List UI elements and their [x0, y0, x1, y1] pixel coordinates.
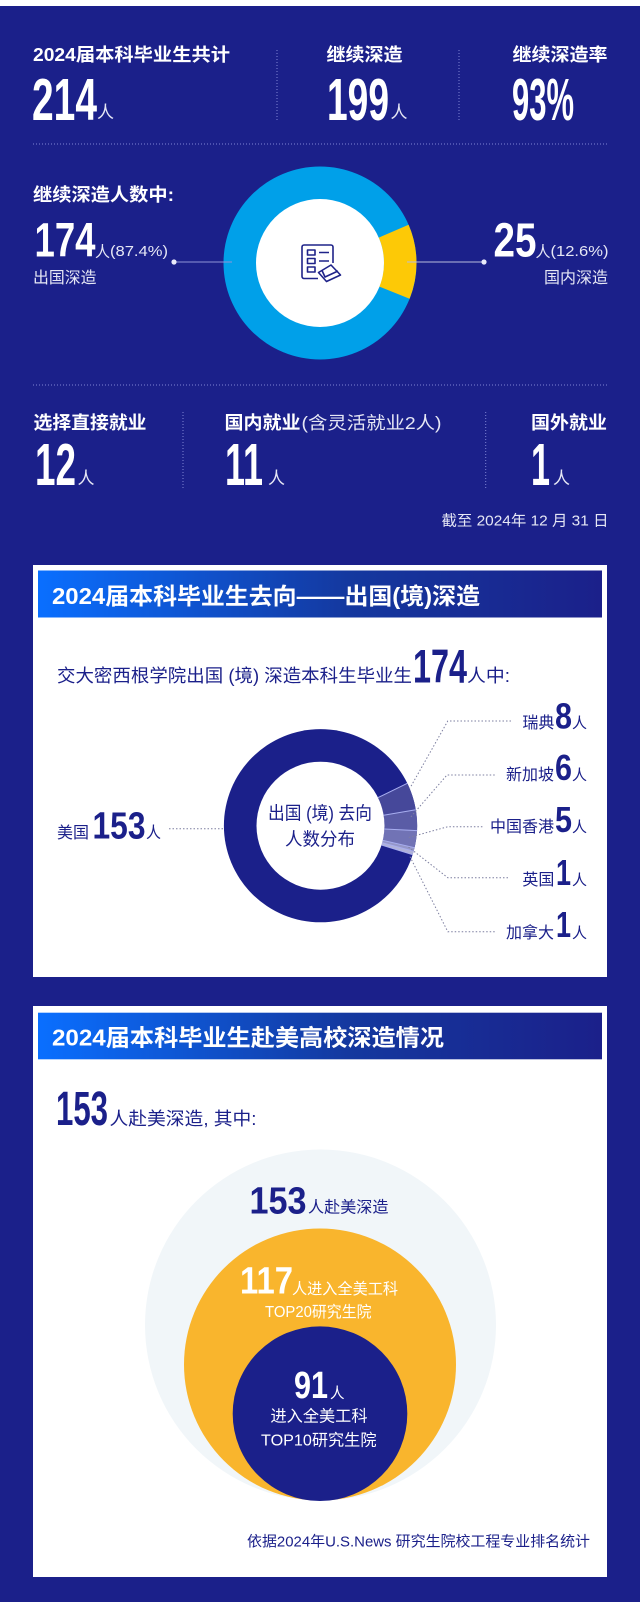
circle: 153 to US [145, 1150, 496, 1500]
callout: domestic [407, 214, 608, 287]
panel: overseas destinations [33, 565, 607, 977]
source note: 依据2024年U.S.News 研究生院校工程专业排名统计 [247, 1534, 590, 1550]
card background [33, 1006, 607, 1577]
stat: domestic employment [224, 413, 442, 498]
stat: overseas employment: 国外就业 [531, 413, 607, 433]
label: Hong Kong: 5 [555, 799, 572, 840]
stat: continuing study rate [512, 44, 608, 133]
label: Hong Kong: 人 [572, 819, 587, 836]
label: UK: 英国 [522, 871, 554, 889]
label: UK [408, 847, 587, 893]
callout: domestic: (12.6%) [550, 243, 608, 260]
stat: domestic employment: 人 [268, 469, 285, 488]
stat: total graduates [32, 45, 230, 133]
stat: continuing study [326, 44, 408, 133]
label: Singapore: 新加坡 [506, 766, 554, 784]
callout: abroad: 出国深造 [33, 269, 96, 287]
callout: abroad: 174 [34, 214, 96, 268]
section heading bar [38, 1013, 602, 1059]
stat: domestic employment: 国内就业 [224, 413, 300, 433]
label: Sweden: 瑞典 [522, 714, 554, 732]
stat: direct employment: 人 [78, 469, 94, 488]
circle: 91 top 10: 91 [294, 1365, 328, 1407]
circle: 117 top 20: 117 [240, 1260, 293, 1302]
label: Hong Kong [408, 799, 587, 840]
stat: continuing study: 199 [327, 67, 389, 133]
intro sentence [57, 640, 510, 692]
panel: graduate totals [32, 44, 608, 144]
panel: continuing study split [33, 166, 608, 385]
icon: checklist with graduation cap [302, 245, 340, 282]
stat: domestic employment: (含灵活就业2人) [302, 413, 442, 433]
donut chart: destinations [224, 729, 417, 922]
section heading bar: 2024届本科毕业生去向——出国(境)深造 [52, 583, 480, 609]
callout: domestic: 人 [536, 243, 550, 261]
stat: direct employment: 选择直接就业 [34, 412, 146, 433]
card background [33, 565, 607, 977]
section heading bar [38, 570, 602, 618]
stat: continuing study rate: 继续深造率 [512, 44, 608, 65]
circle: 91 top 10: 进入全美工科 [270, 1408, 368, 1426]
circle: 153 to US: 153 [250, 1180, 306, 1222]
stat: direct employment: 12 [35, 432, 76, 498]
label: USA: 美国 [57, 824, 89, 842]
label: UK: 1 [556, 852, 571, 893]
circle: 91 top 10: TOP10研究生院 [261, 1432, 376, 1450]
donut centre label: 人数分布 [285, 830, 355, 850]
circle: 91 top 10 [233, 1326, 407, 1501]
stat: overseas employment [531, 413, 607, 498]
panel: US graduate study [33, 1006, 607, 1577]
note: data date: 截至 2024年 12 月 31 日 [442, 512, 608, 530]
donut centre label: 出国 (境) 去向 [268, 804, 372, 824]
donut centre label [268, 804, 372, 850]
stat: continuing study: 继续深造 [326, 44, 402, 65]
panel: direct employment [34, 412, 608, 530]
stat: domestic employment: 11 [225, 432, 263, 498]
top white strip [0, 0, 640, 6]
label: Canada: 人 [572, 925, 587, 942]
label: USA: 人 [146, 824, 161, 842]
stat: overseas employment: 人 [553, 469, 570, 488]
intro sentence: 153 [56, 1083, 108, 1136]
stat: total graduates: 人 [97, 103, 114, 122]
circle: 153 to US: 人赴美深造 [308, 1198, 388, 1216]
intro sentence: 174 [413, 640, 467, 692]
stat: continuing study rate: 93% [512, 67, 574, 133]
heading: among continuing: 继续深造人数中: [33, 184, 174, 205]
nested circles chart [145, 1150, 496, 1501]
stat: overseas employment: 1 [531, 432, 550, 498]
stat: direct employment [34, 412, 146, 498]
label: Sweden: 8 [555, 696, 572, 736]
label: Canada: 1 [556, 904, 571, 945]
callout: domestic: 国内深造 [544, 269, 608, 287]
intro sentence: 人中: [467, 666, 510, 686]
label: Singapore: 人 [572, 767, 587, 784]
callout: abroad: 人 [95, 243, 110, 261]
stat: total graduates: 2024届本科毕业生共计 [33, 45, 230, 65]
intro sentence: 人赴美深造, 其中: [110, 1109, 256, 1129]
label: Sweden: 人 [572, 715, 587, 732]
callout: abroad: (87.4%) [110, 243, 168, 260]
donut chart: abroad vs domestic [224, 166, 417, 360]
callout: domestic: 25 [494, 214, 536, 268]
label: Canada [410, 857, 587, 945]
label: Singapore [410, 747, 587, 818]
label: Singapore: 6 [555, 747, 572, 788]
circle: 117 top 20: TOP20研究生院 [265, 1302, 372, 1321]
stat: continuing study: 人 [390, 103, 408, 122]
label: UK: 人 [572, 872, 587, 889]
section heading bar: 2024届本科毕业生赴美高校深造情况 [52, 1024, 444, 1050]
intro sentence [56, 1083, 256, 1136]
label: USA: 153 [92, 806, 146, 848]
circle: 117 top 20 [184, 1228, 456, 1500]
intro sentence: 交大密西根学院出国 (境) 深造本科生毕业生 [57, 666, 412, 686]
circle: 117 top 20: 人进入全美工科 [292, 1280, 398, 1298]
stat: total graduates: 214 [32, 67, 97, 133]
label: Hong Kong: 中国香港 [490, 818, 554, 836]
label: Sweden [410, 696, 587, 788]
label: Canada: 加拿大 [506, 923, 554, 942]
label: USA [57, 806, 224, 848]
callout: abroad [33, 214, 232, 287]
circle: 91 top 10: 人 [330, 1385, 344, 1402]
